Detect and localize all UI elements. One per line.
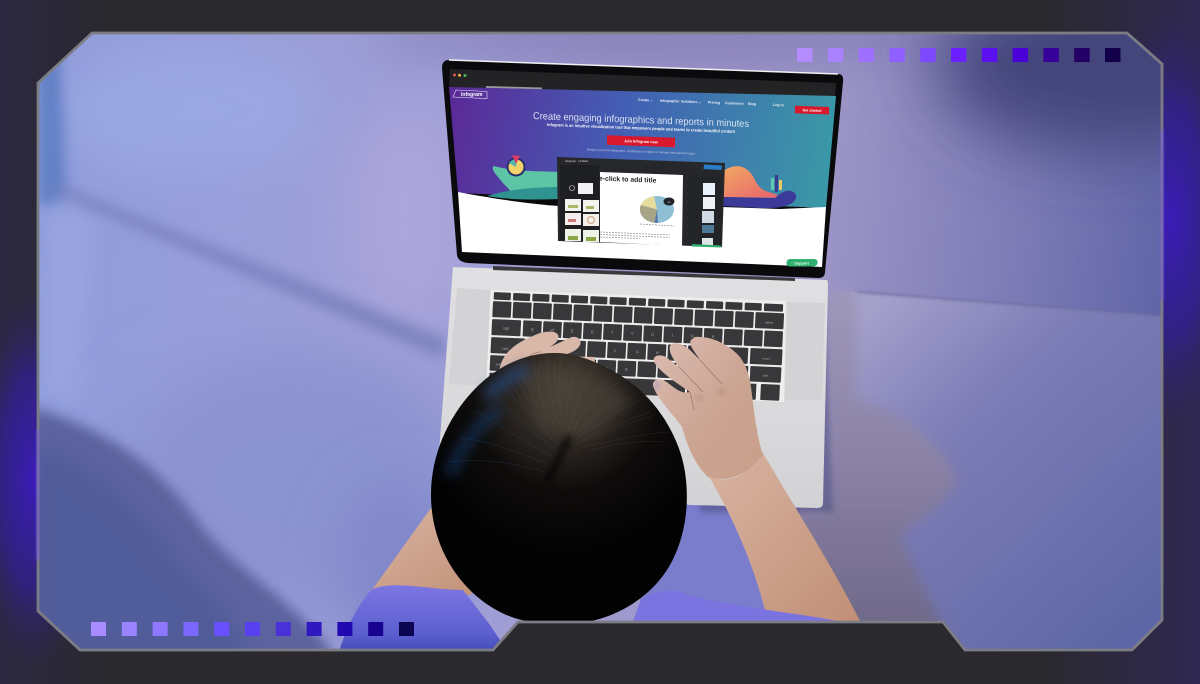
navigation: Create ⌄ xyxy=(638,98,653,102)
address bar xyxy=(486,86,542,90)
space under arm xyxy=(640,504,765,610)
navigation: Customers xyxy=(725,101,744,106)
slide body text lines xyxy=(600,224,674,238)
key legends: caps xyxy=(501,347,509,351)
navigation: Log in xyxy=(773,103,784,107)
publish button xyxy=(704,164,722,170)
white lower section xyxy=(458,192,826,267)
logo: Infogram xyxy=(461,92,483,98)
speaker panels xyxy=(450,288,825,386)
key legends: Y xyxy=(631,331,634,336)
key legends: F xyxy=(614,348,617,353)
navigation xyxy=(638,98,784,107)
knuckle shading xyxy=(694,388,727,402)
screen xyxy=(449,69,836,267)
support chat button: ◌ Support xyxy=(791,262,810,266)
laptop base xyxy=(438,267,828,508)
left arm xyxy=(372,508,500,595)
hero text xyxy=(534,98,829,155)
navigation: Blog xyxy=(748,102,756,106)
key legends: tab xyxy=(503,326,510,331)
editor toolbar labels: Infogram · Untitled xyxy=(565,159,588,163)
right slides panel xyxy=(688,175,722,245)
person and laptop cast shadow xyxy=(796,292,956,621)
top-right shadow xyxy=(935,0,1200,150)
call to action button xyxy=(607,135,675,147)
pie chart xyxy=(640,196,674,223)
function key row xyxy=(494,292,783,312)
small print: Design your first infographic, dashboard or report in minutes and partner logos xyxy=(587,148,696,156)
slide canvas xyxy=(600,172,683,246)
key legends: N xyxy=(625,367,628,372)
key legends: J xyxy=(676,351,678,356)
thumb nail xyxy=(654,381,660,391)
right lower area xyxy=(850,292,1170,660)
diagonal window shadow xyxy=(56,184,445,360)
number key row xyxy=(492,301,784,329)
navigation: Pricing xyxy=(708,100,720,105)
home key row xyxy=(490,337,783,365)
key legends: E xyxy=(571,328,574,334)
bottom-left square row xyxy=(91,622,414,636)
gradient hero xyxy=(449,87,836,208)
laptop shadow xyxy=(700,300,833,512)
headline: Create engaging infographics and reports in minutes xyxy=(533,111,749,130)
finger gaps xyxy=(680,360,722,410)
key legends: G xyxy=(636,349,639,354)
support chat button xyxy=(786,259,818,266)
key legends: R xyxy=(591,329,594,334)
pie chart: ••• xyxy=(668,200,670,204)
logo xyxy=(453,90,487,98)
blue-toned hair strands xyxy=(448,382,558,472)
head xyxy=(431,353,687,624)
person xyxy=(338,332,862,655)
top-left bright patch xyxy=(84,62,284,154)
lower key row xyxy=(490,355,781,383)
subhead: Infogram is an intuitive visualization tool that empowers people and teams to create beautiful content xyxy=(547,122,736,134)
editor window xyxy=(557,157,725,248)
key legends: shift xyxy=(496,362,501,367)
QWERTY key row xyxy=(491,319,783,347)
key legends: P xyxy=(712,334,715,339)
right shirt sleeve xyxy=(630,590,838,630)
key legends: Q xyxy=(531,327,534,332)
laptop lid bezel xyxy=(442,60,843,278)
browser chrome xyxy=(449,69,836,97)
key legends: B xyxy=(605,366,608,371)
green status strip xyxy=(692,244,721,248)
right hand xyxy=(653,337,763,479)
centre light xyxy=(352,130,448,310)
left hero illustration xyxy=(487,155,560,200)
hinge xyxy=(493,266,795,281)
left lower bright strip xyxy=(58,226,76,359)
lower middle tone xyxy=(152,350,443,608)
bottom key row xyxy=(489,373,780,401)
key legends xyxy=(496,321,773,377)
left vertical shadow xyxy=(38,50,66,205)
navigation: Infographic xyxy=(660,99,680,103)
top centre dim xyxy=(380,34,907,70)
pie icon xyxy=(506,155,526,176)
key legends: O xyxy=(691,333,694,339)
key legends: U xyxy=(651,332,654,337)
left hand xyxy=(498,332,596,400)
laptop xyxy=(438,60,843,512)
lower-left shadow area xyxy=(30,407,330,660)
top-right square row xyxy=(797,48,1120,62)
right upper area xyxy=(872,70,1161,316)
key legends: shift xyxy=(763,374,768,378)
left thumbnail panel xyxy=(560,165,599,242)
hair part xyxy=(546,436,569,482)
navigation: Solutions ⌄ xyxy=(681,99,701,104)
traffic lights xyxy=(453,74,466,77)
lid top highlight xyxy=(449,60,838,74)
left shirt sleeve xyxy=(338,585,510,655)
brown crown sheen xyxy=(520,366,632,438)
key legends: delete xyxy=(765,321,774,325)
frame glow segments xyxy=(38,130,1162,560)
call to action button: Join Infogram now xyxy=(624,139,658,144)
key legends: I xyxy=(672,333,673,338)
key legends: T xyxy=(611,330,614,335)
hair strands xyxy=(506,355,668,450)
right hero illustration xyxy=(722,166,796,208)
keyboard xyxy=(486,290,786,402)
slide title: e-click to add title xyxy=(599,176,657,185)
get started button xyxy=(795,106,829,114)
blue hair highlights xyxy=(450,369,528,475)
key legends: return xyxy=(762,356,771,361)
key legends: H xyxy=(656,350,659,355)
get started button: Get started xyxy=(803,108,821,113)
table edge line xyxy=(857,292,1162,316)
key legends: W xyxy=(550,328,554,333)
right arm xyxy=(708,453,862,625)
